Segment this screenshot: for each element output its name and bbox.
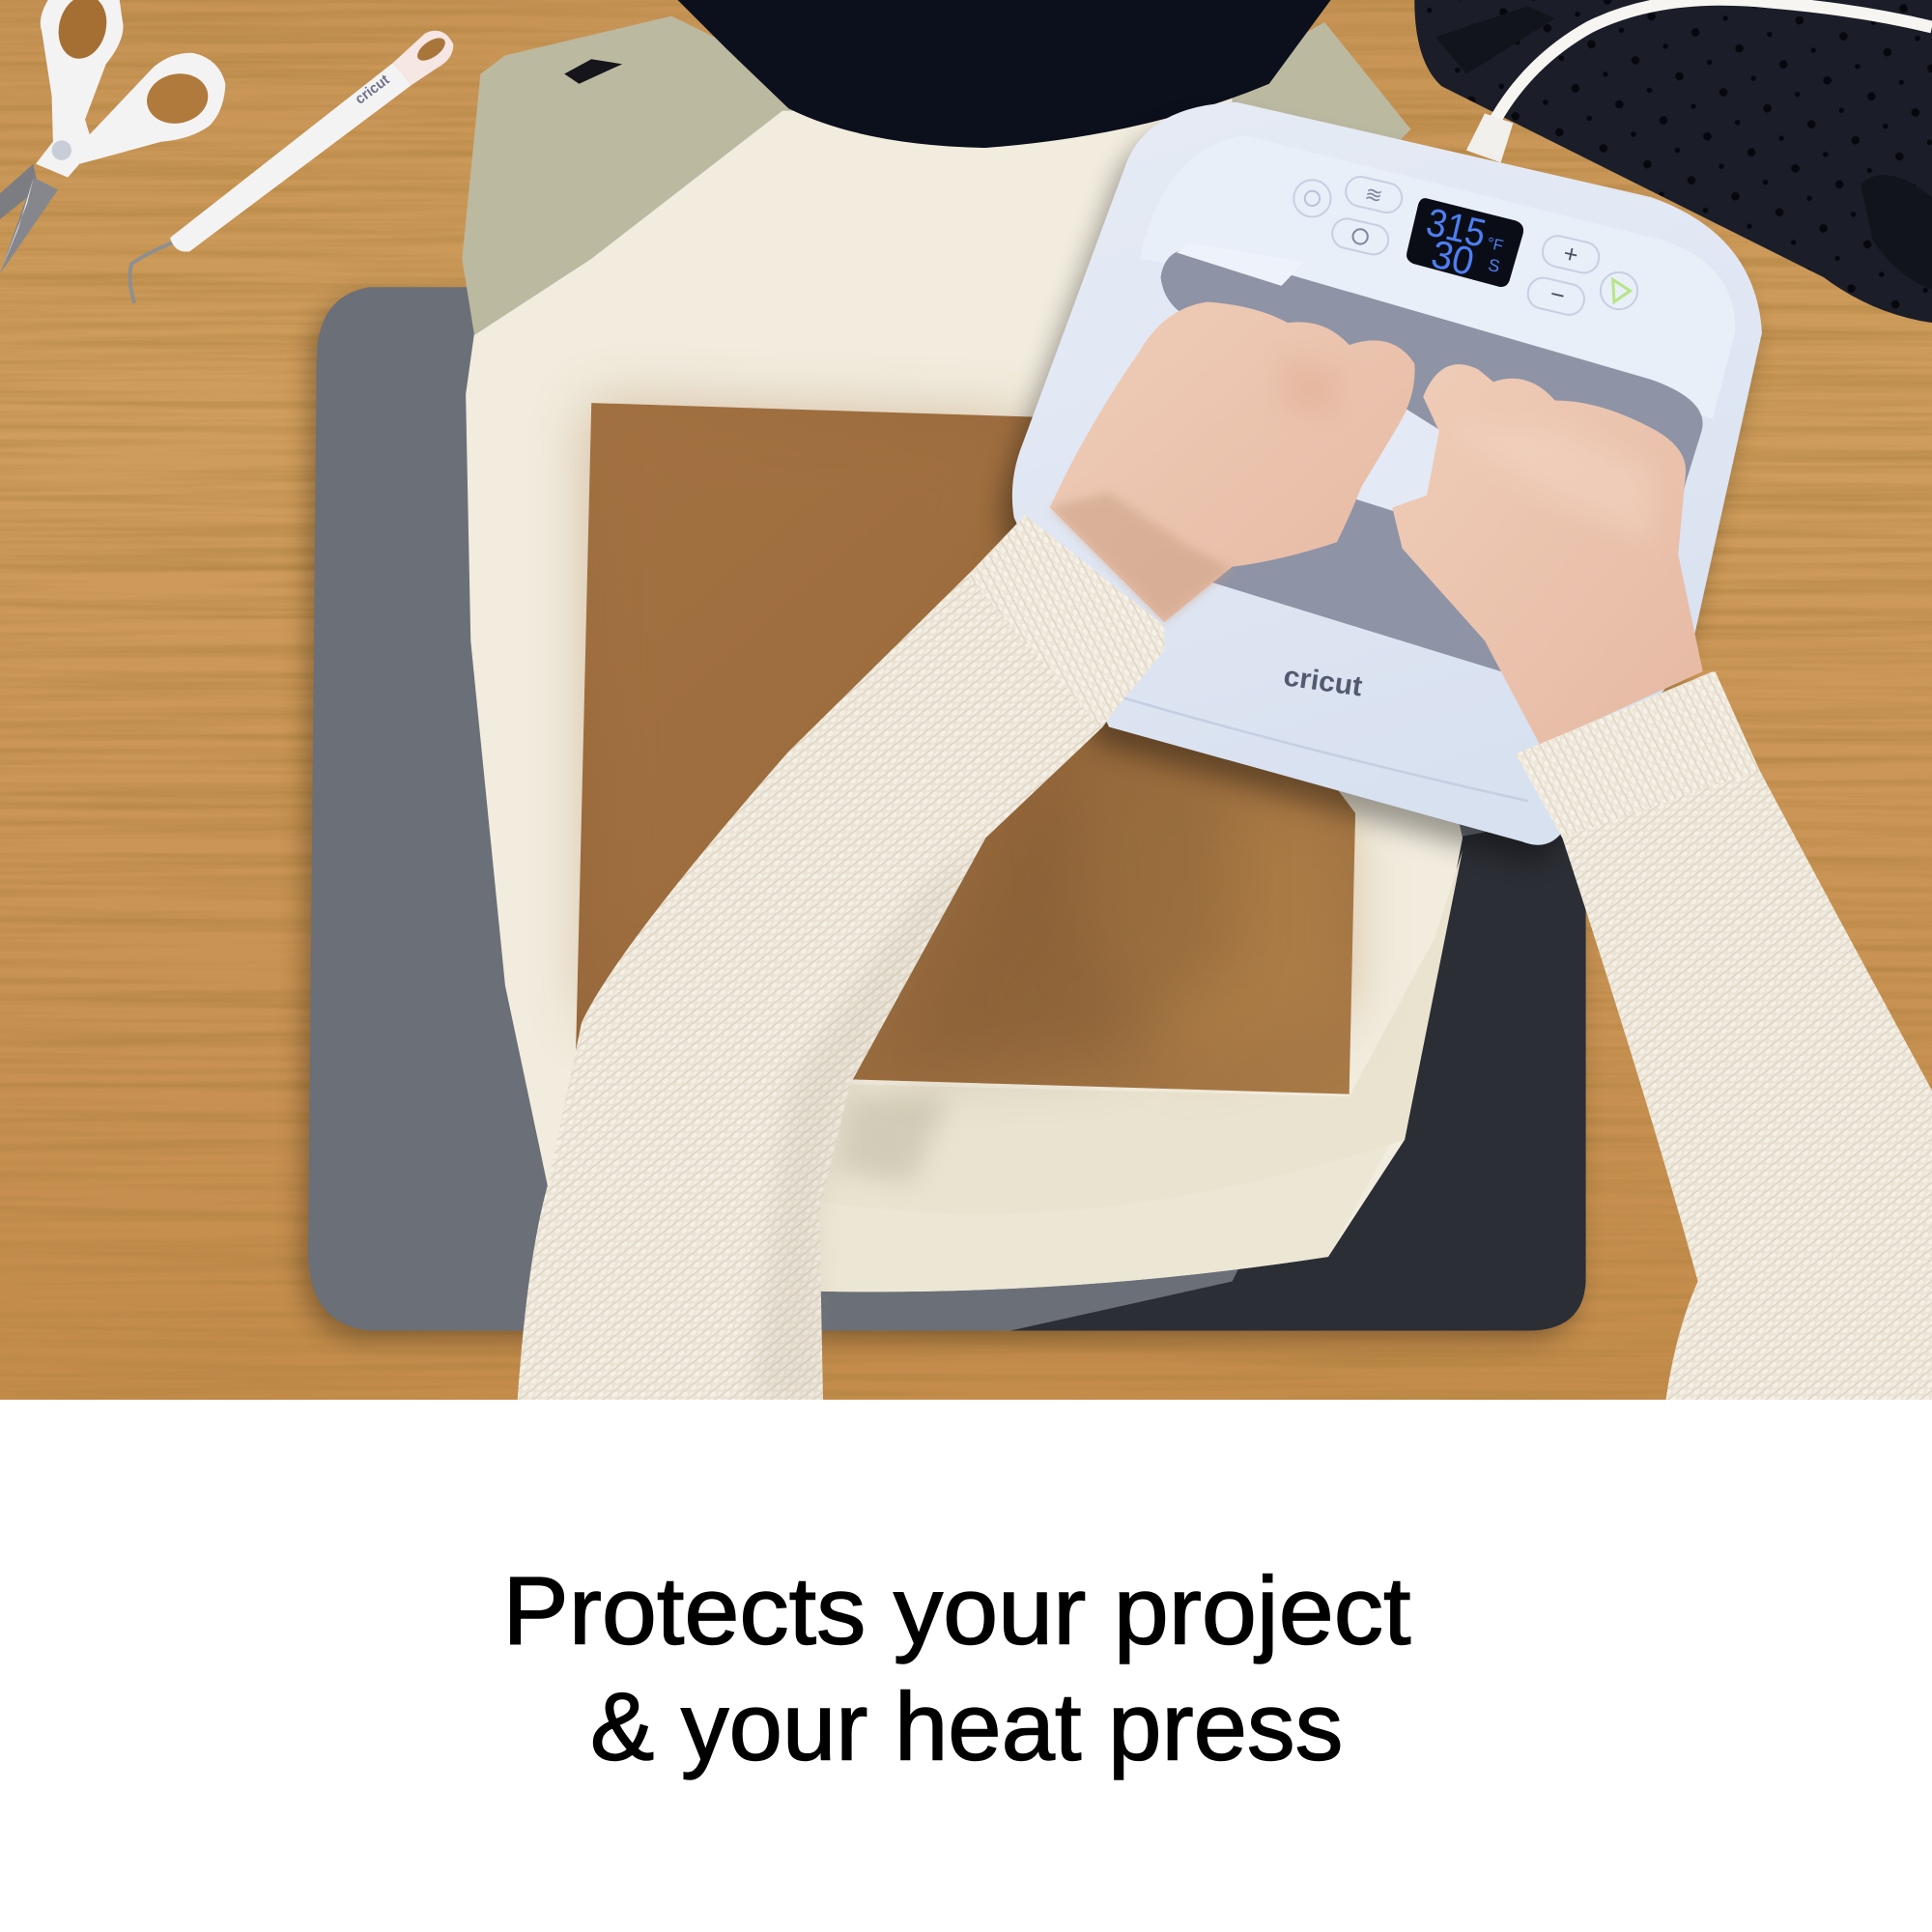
press shadow	[1003, 120, 1752, 863]
top panel	[1140, 135, 1735, 419]
protective sheet	[576, 403, 1355, 1094]
scissors handle two	[80, 53, 225, 164]
temperature and time display: °F	[1485, 234, 1505, 255]
heat press	[1003, 102, 1762, 863]
white caption band	[0, 1400, 1932, 1932]
right sleeve	[1516, 671, 1932, 1400]
press logo: cricut	[1282, 660, 1364, 703]
wooden table	[0, 0, 1932, 1400]
play icon	[1613, 280, 1631, 301]
photo: heat press on sweatshirt	[0, 0, 1932, 1400]
left hand	[1050, 301, 1415, 622]
handle bar	[1355, 404, 1441, 522]
temperature and time display: 30	[1428, 231, 1478, 284]
lower lip	[1109, 694, 1528, 801]
temperature and time display: 315	[1422, 199, 1490, 256]
temperature and time display	[1406, 198, 1523, 287]
sweatshirt body	[466, 86, 1463, 1292]
press body	[1012, 102, 1762, 845]
weeding tool	[129, 31, 453, 303]
scissors pivot	[52, 140, 71, 160]
plus button label: +	[1561, 240, 1580, 270]
heading	[502, 1558, 1410, 1780]
wave icon: ≋	[1362, 181, 1385, 209]
left sleeve	[518, 515, 1164, 1400]
temperature and time display: S	[1487, 255, 1502, 276]
minus button label: −	[1548, 280, 1568, 310]
heading: & your heat press	[590, 1673, 1343, 1780]
right hand	[1392, 364, 1703, 746]
heading: Protects your project	[502, 1558, 1410, 1665]
pressing mat	[300, 287, 1586, 1341]
silicone base with holes	[1414, 0, 1932, 323]
sweatshirt collar fabric	[462, 16, 1410, 335]
handle recess	[1161, 249, 1703, 675]
scissors	[0, 0, 225, 273]
scissors blades	[0, 164, 37, 219]
scissors handle one	[36, 0, 124, 178]
weeding tool: cricut	[353, 71, 392, 108]
power cable	[1466, 0, 1932, 162]
black hood	[678, 0, 1331, 148]
control buttons	[1293, 174, 1637, 318]
